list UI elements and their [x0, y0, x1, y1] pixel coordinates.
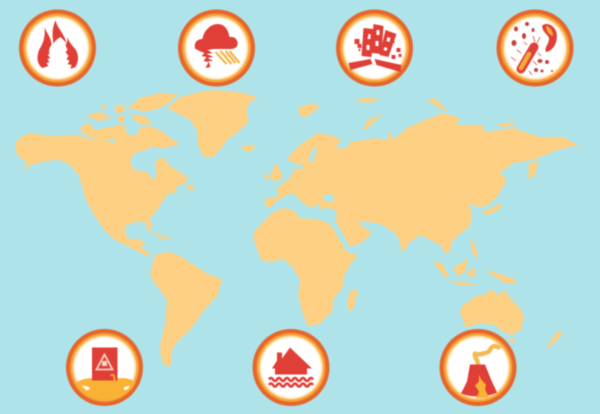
icon: volcano — [440, 329, 516, 406]
icon: flood — [252, 329, 330, 406]
Tasmania — [508, 338, 516, 343]
New Zealand — [545, 331, 563, 349]
Africa — [253, 208, 358, 326]
Sumatra and Malay — [433, 262, 449, 279]
icon: storm — [178, 10, 255, 86]
icon: wildfire — [19, 10, 96, 86]
Philippines — [470, 240, 478, 258]
Novaya Zemlya — [362, 113, 385, 131]
Australia — [460, 289, 524, 335]
icon: toxic spill — [66, 329, 143, 406]
UK and Ireland — [270, 163, 283, 181]
Svalbard — [298, 104, 320, 118]
Java — [449, 281, 480, 286]
Greenland — [167, 90, 257, 157]
Japan — [481, 204, 503, 215]
Borneo — [453, 258, 468, 276]
Sakhalin — [528, 160, 539, 180]
Central America islands — [150, 232, 175, 240]
Iceland — [241, 145, 256, 151]
icon: earthquake — [336, 10, 413, 86]
world map — [15, 90, 578, 366]
North America — [15, 126, 188, 257]
Arctic islands — [128, 93, 178, 112]
New Guinea — [484, 270, 518, 283]
Black sea cutout — [322, 194, 335, 202]
South America — [150, 252, 222, 366]
Arctic Russia islands — [427, 98, 447, 112]
Madagascar — [347, 290, 358, 312]
Eurasia — [265, 113, 578, 255]
icon: bacteria — [496, 10, 574, 86]
Sulawesi — [468, 268, 476, 277]
Baltic sea cutout — [308, 148, 318, 162]
Newfoundland — [186, 184, 194, 190]
